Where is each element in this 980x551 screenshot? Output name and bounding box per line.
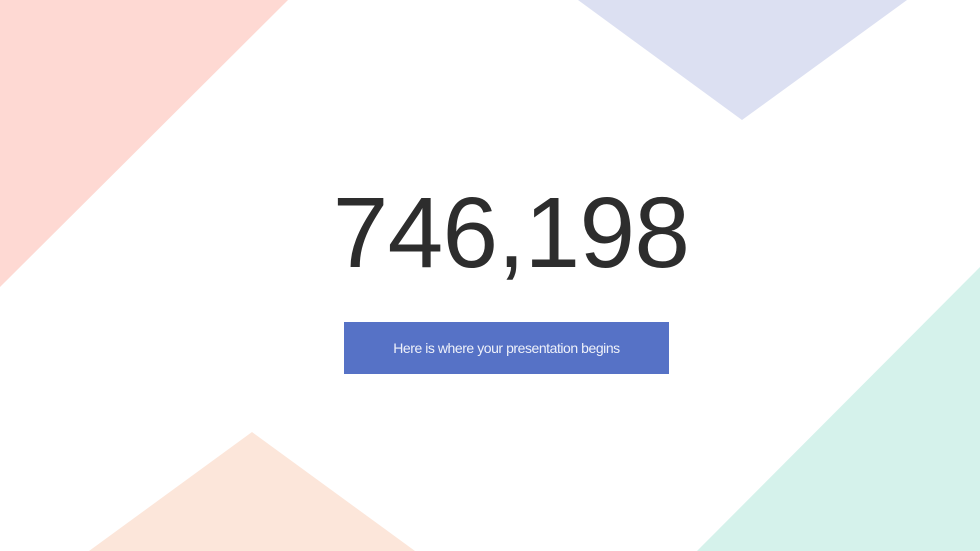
shape: pink triangle top left — [0, 0, 288, 287]
shape: mint triangle bottom right — [697, 267, 980, 551]
subtitle banner: Here is where your presentation begins — [393, 340, 620, 356]
shape: peach triangle bottom left — [89, 432, 415, 551]
big number: 746,198 — [333, 177, 689, 289]
shape: lavender chevron top right — [578, 0, 907, 120]
subtitle banner — [344, 322, 669, 374]
